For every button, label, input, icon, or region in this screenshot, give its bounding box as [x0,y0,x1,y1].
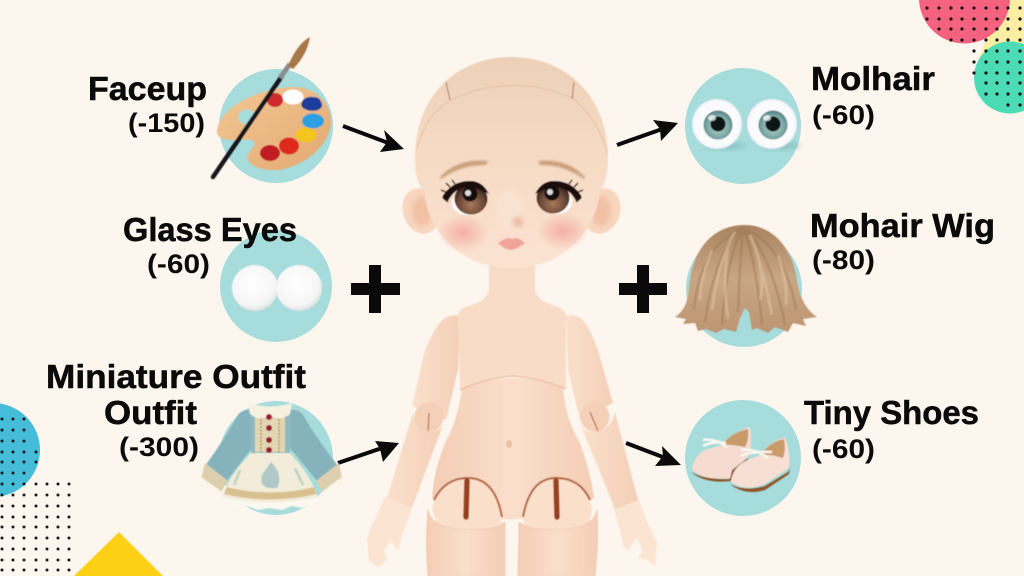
icon: left shoe [691,427,751,482]
label: faceup: (-150) [128,108,205,138]
dress collar [248,403,292,418]
item: cotton balls [220,230,332,342]
plus sign left [351,265,400,313]
arrow: body to shoes [626,443,681,466]
doll legs [426,510,598,576]
shadow: left eye [706,142,746,150]
circle backdrop [219,69,333,183]
circle backdrop [685,68,801,184]
label: mohair wig: (-80) [812,245,875,275]
arrow: faceup to head [343,126,404,152]
icon: paint brush [213,37,310,177]
doll nose [513,217,523,227]
label: molhair: Molhair [811,60,935,97]
dress bodice [250,410,291,453]
plus sign right [619,265,667,313]
label: tiny shoes: (-60) [812,434,875,464]
label: miniature outfit: Outfit [104,394,197,431]
label: mohair wig [810,207,995,275]
decoration: top right shapes [919,0,1024,114]
icon: dress [200,403,344,510]
label: miniature outfit [46,358,306,462]
icon: right cotton ball [276,265,322,311]
dress buttons [266,414,272,453]
doll hip joints [432,478,592,530]
icon: left cotton ball [232,265,278,311]
label: tiny shoes [804,394,979,464]
doll ears [397,184,626,238]
label: glass eyes [123,211,297,279]
doll right arm [566,315,657,566]
circle backdrop [685,400,801,516]
item: faceup palette [213,37,333,183]
doll left eye [441,180,489,215]
arrow: head to eyes [617,120,678,145]
doll right eye [535,180,583,214]
icon: right shoe [730,437,790,492]
doll figure [367,57,657,576]
label: tiny shoes: Tiny Shoes [804,394,979,431]
label: glass eyes: Glass Eyes [123,211,297,248]
doll left arm [367,315,460,567]
icon: wig [675,225,817,333]
label: glass eyes: (-60) [147,249,210,279]
label: faceup [88,70,207,138]
item: mohair wig [675,225,817,347]
dress sleeves [205,410,252,482]
shadow: right eye [761,142,801,150]
arrow: outfit to body [338,441,399,463]
dress skirt [223,453,318,505]
label: miniature outfit: Miniature Outfit [46,358,306,395]
item: glass eyes [685,68,801,184]
icon: palette [213,37,331,177]
item: miniature outfit [200,401,344,515]
label: faceup: Faceup [88,70,207,107]
doll mouth [498,238,525,250]
decoration: bottom left shapes [0,403,163,576]
label: miniature outfit: (-300) [119,432,199,462]
icon: right eye [747,99,797,149]
label: mohair wig: Mohair Wig [810,207,995,244]
doll eyebrows [440,161,585,179]
circle backdrop [220,230,332,342]
label: molhair [811,60,935,130]
label: molhair: (-60) [812,100,875,130]
circle backdrop [219,401,333,515]
circle backdrop [686,231,802,347]
item: tiny shoes [685,400,801,516]
doll head [415,57,608,268]
icon: left eye [692,99,742,149]
doll torso [432,262,594,520]
